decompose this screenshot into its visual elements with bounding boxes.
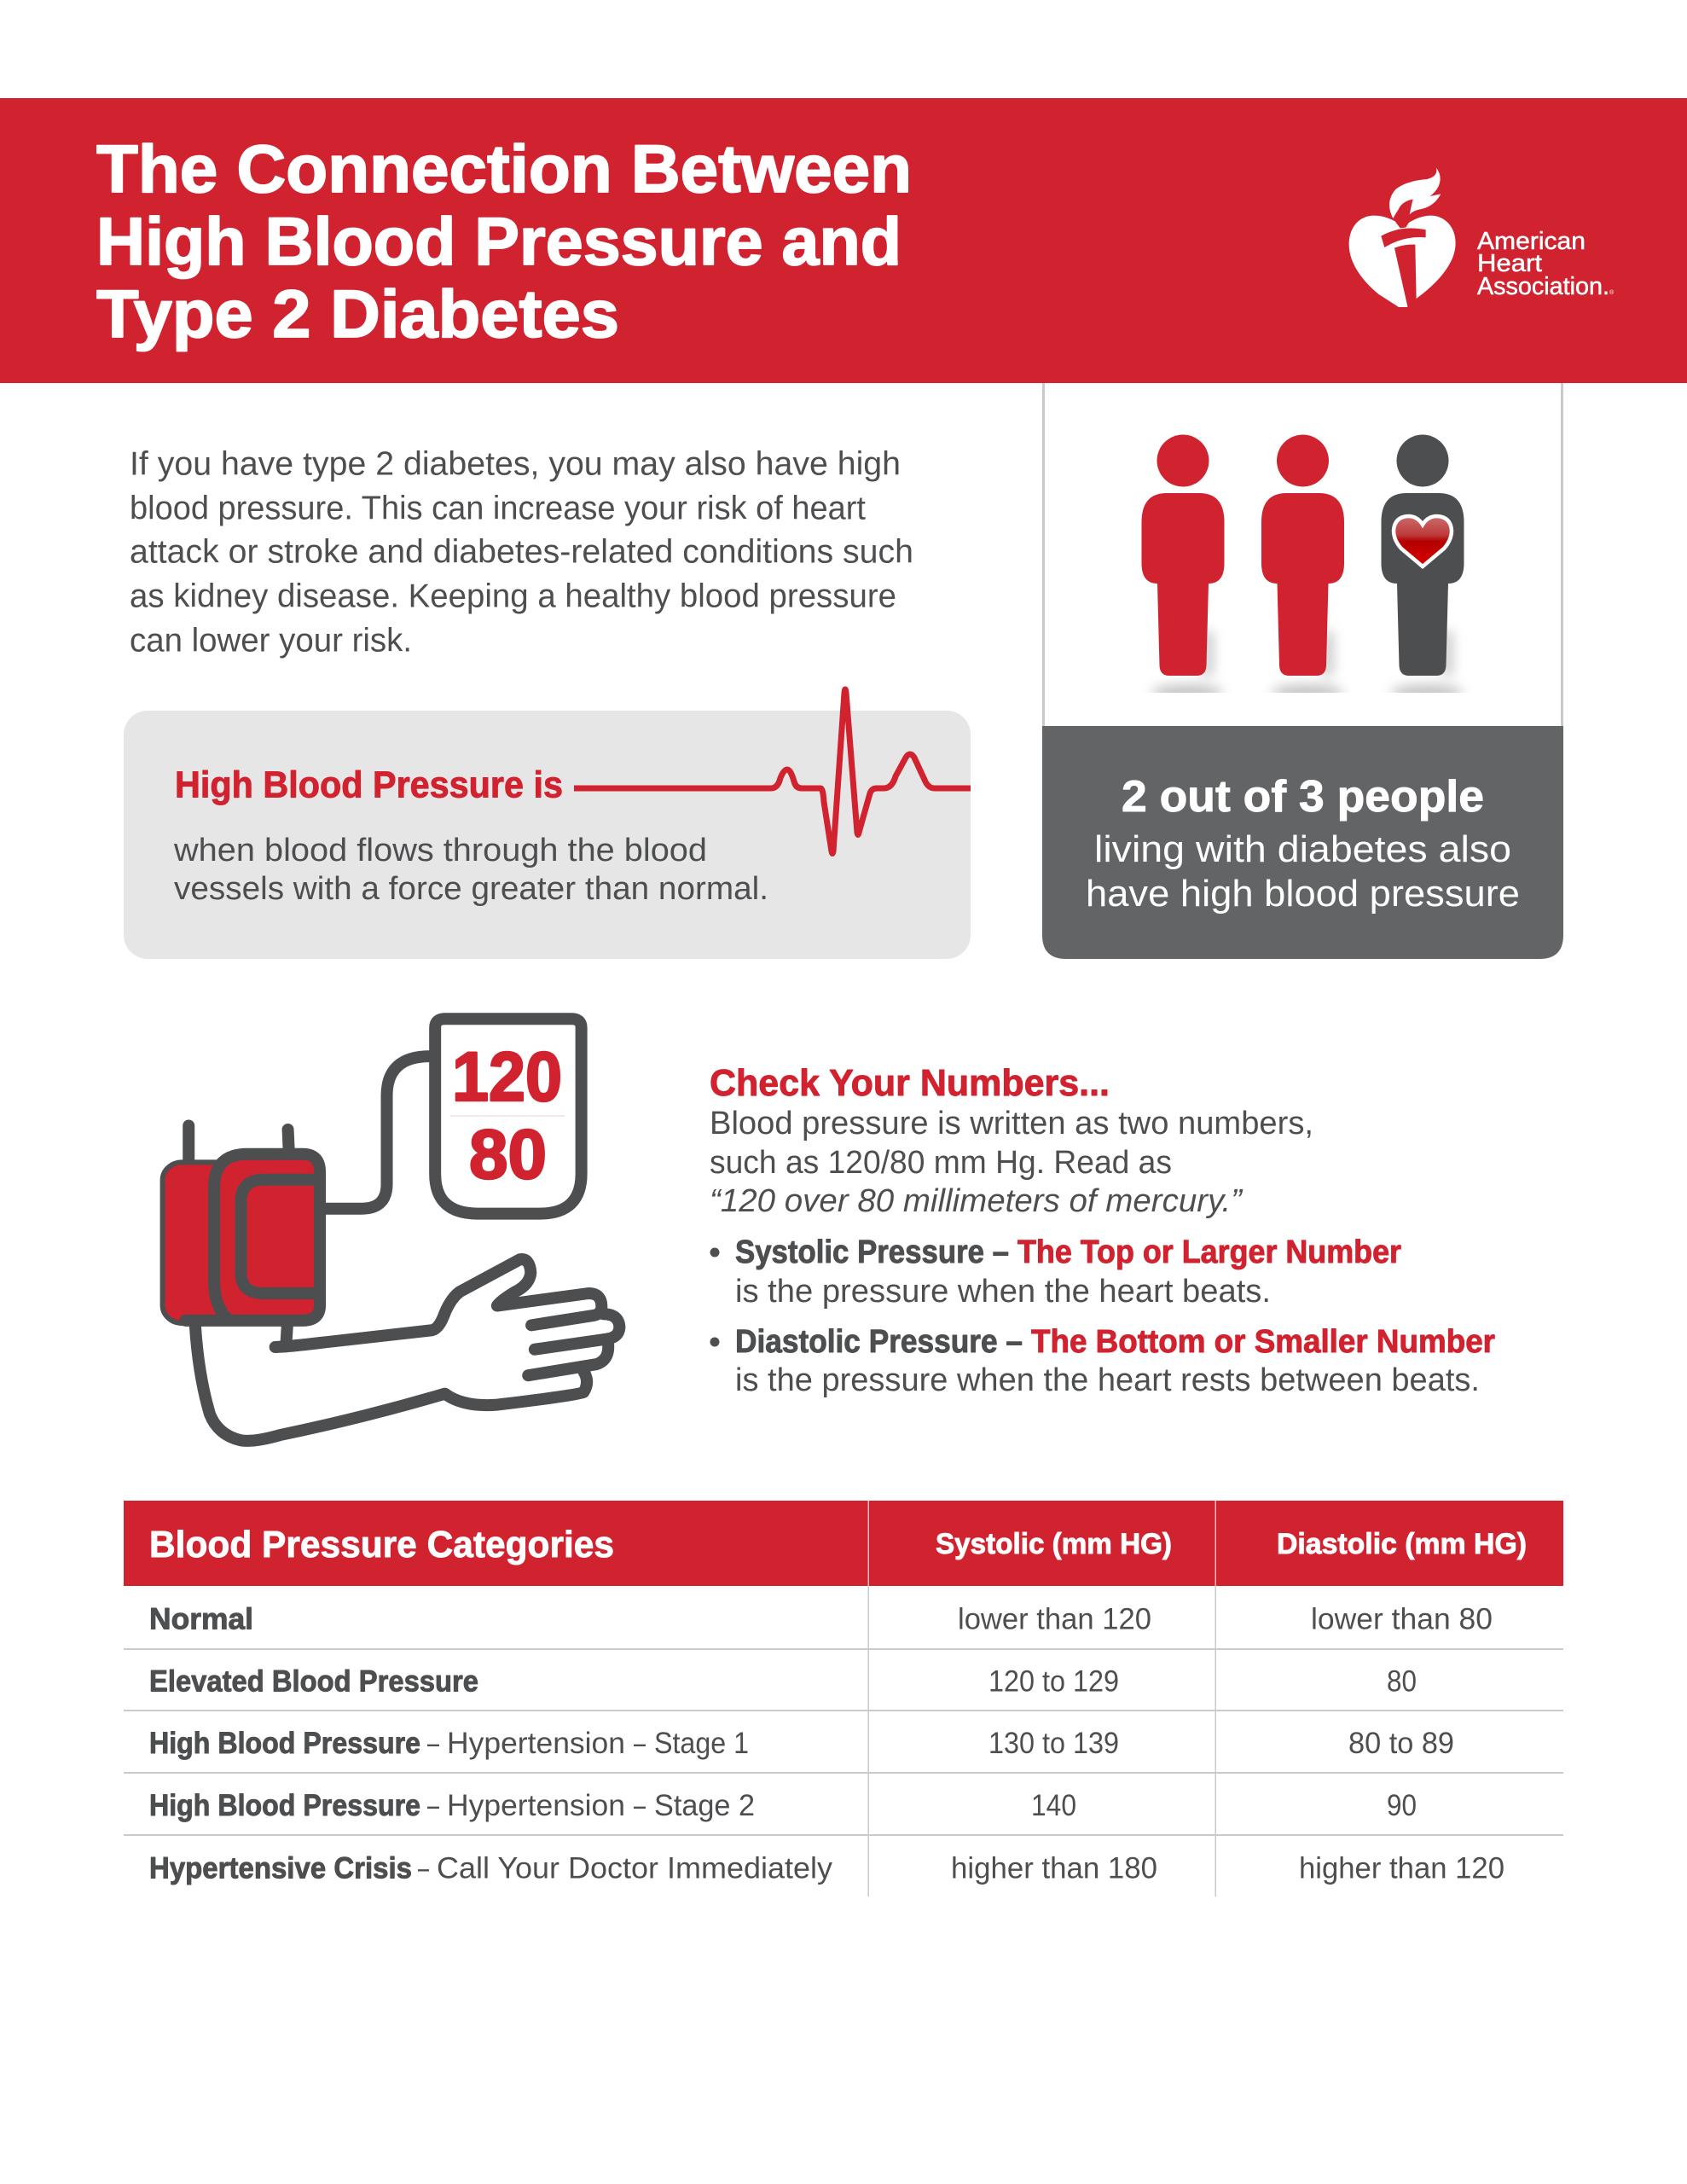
explanation text: Blood pressure is written as two numbers, [710,1106,1313,1141]
check your numbers text [710,1062,1495,1398]
row: elevated: 80 [1387,1665,1417,1698]
stat box: living with diabetes also [1094,828,1511,870]
logo: American Heart Association [1349,168,1615,308]
row: stage 2: Hypertension [447,1789,625,1822]
monitor reading: 120 [452,1038,562,1116]
row: crisis: higher than 180 [951,1851,1157,1885]
definition text: when blood flows through the blood [173,833,707,868]
row: crisis: Call Your Doctor Immediately [437,1851,833,1885]
row: stage 1: Stage 1 [654,1727,749,1760]
row: stage 2: Stage 2 [654,1789,755,1822]
logo wordmark: ® [1609,289,1615,296]
intro text block: attack or stroke and diabetes-related conditions such [130,534,913,570]
bullet: diastolic: is the pressure when the heart rests between beats. [735,1362,1480,1398]
row: stage 1: – [634,1727,646,1760]
bullet: diastolic: The Bottom or Smaller Number [1031,1324,1495,1360]
row: crisis [149,1851,1504,1885]
row: elevated [149,1665,1417,1698]
arm outline and cuff [163,1019,619,1441]
icon: person 3 with heart [1382,435,1464,676]
title: Type 2 Diabetes [96,276,619,351]
heading: high blood pressure is: High Blood Pressure is [175,764,563,805]
panel: 2 out of 3 people [1042,383,1563,959]
row: stage 2: 140 [1031,1789,1076,1822]
row: stage 2: High Blood Pressure [149,1789,420,1822]
intro text block: as kidney disease. Keeping a healthy blood pressure [130,578,896,614]
stat box [1042,726,1563,959]
row: stage 1: 80 to 89 [1348,1727,1454,1760]
row: normal: Normal [149,1602,253,1636]
table header: Systolic (mm HG) [936,1528,1172,1560]
cuff [163,1154,322,1323]
title: High Blood Pressure and [96,203,901,279]
icon: heart and torch [1349,168,1456,308]
row: stage 2: – [427,1789,439,1822]
stat box: have high blood pressure [1086,873,1520,915]
row: normal [149,1602,1493,1636]
table header: Blood Pressure Categories [149,1524,614,1565]
row: crisis: higher than 120 [1299,1851,1504,1885]
explanation text: “120 over 80 millimeters of mercury.” [710,1183,1244,1219]
stat text: 2 out of 3 people [1122,772,1484,822]
bullet: systolic: Systolic Pressure – [735,1234,1009,1270]
logo wordmark [1477,228,1615,300]
row: stage 1: High Blood Pressure [149,1727,420,1760]
intro text block: can lower your risk. [130,623,412,659]
icon: person 1 [1141,435,1225,676]
monitor reading [450,1038,565,1194]
illustration: blood pressure monitor on arm [163,1019,619,1441]
tube [322,1056,430,1209]
row: normal: lower than 80 [1311,1602,1493,1636]
logo wordmark: American [1477,228,1586,255]
arm [195,1259,619,1441]
row: stage 1: 130 to 139 [988,1727,1119,1760]
table: blood pressure categories [124,1501,1563,1896]
explanation text: such as 120/80 mm Hg. Read as [710,1145,1172,1181]
row: crisis: – [418,1851,429,1885]
table header [124,1501,1563,1586]
bullet: diastolic [710,1324,1495,1398]
row: stage 2 [149,1789,1417,1822]
row: stage 1 [149,1727,1454,1760]
row: elevated: Elevated Blood Pressure [149,1665,478,1698]
table header: Diastolic (mm HG) [1277,1528,1527,1560]
bullet: diastolic: Diastolic Pressure – [735,1324,1023,1360]
bullet: systolic: is the pressure when the heart beats. [735,1274,1271,1310]
icon: ECG line [574,689,971,853]
logo wordmark: Heart [1477,250,1542,277]
definition text [173,833,768,907]
row: stage 2: – [634,1789,646,1822]
intro text block: If you have type 2 diabetes, you may also have high [130,445,901,483]
explanation text [710,1106,1313,1219]
icon: person 2 [1261,435,1344,676]
row: crisis: Hypertensive Crisis [149,1851,412,1885]
definition text: vessels with a force greater than normal. [174,871,768,907]
shadows [1151,631,1463,701]
row: stage 1: Hypertension [447,1727,625,1760]
logo wordmark: Association. [1477,273,1609,300]
row: elevated: 120 to 129 [988,1665,1119,1698]
title [96,131,912,351]
panel: high blood pressure definition [124,689,971,959]
monitor reading: 80 [469,1116,547,1194]
heading: check your numbers: Check Your Numbers... [710,1062,1110,1104]
monitor [435,1019,582,1214]
intro text block: blood pressure. This can increase your risk of heart [130,490,866,527]
header banner [0,98,1687,383]
row: stage 1: – [427,1727,439,1760]
cuff pegs [188,1125,289,1160]
bullet: systolic: The Top or Larger Number [1017,1234,1401,1270]
icon group: three people [1141,435,1464,701]
bullet: systolic [710,1234,1401,1310]
row: stage 2: 90 [1387,1789,1417,1822]
intro text block [130,445,913,659]
title: The Connection Between [96,131,912,206]
row: normal: lower than 120 [958,1602,1151,1636]
